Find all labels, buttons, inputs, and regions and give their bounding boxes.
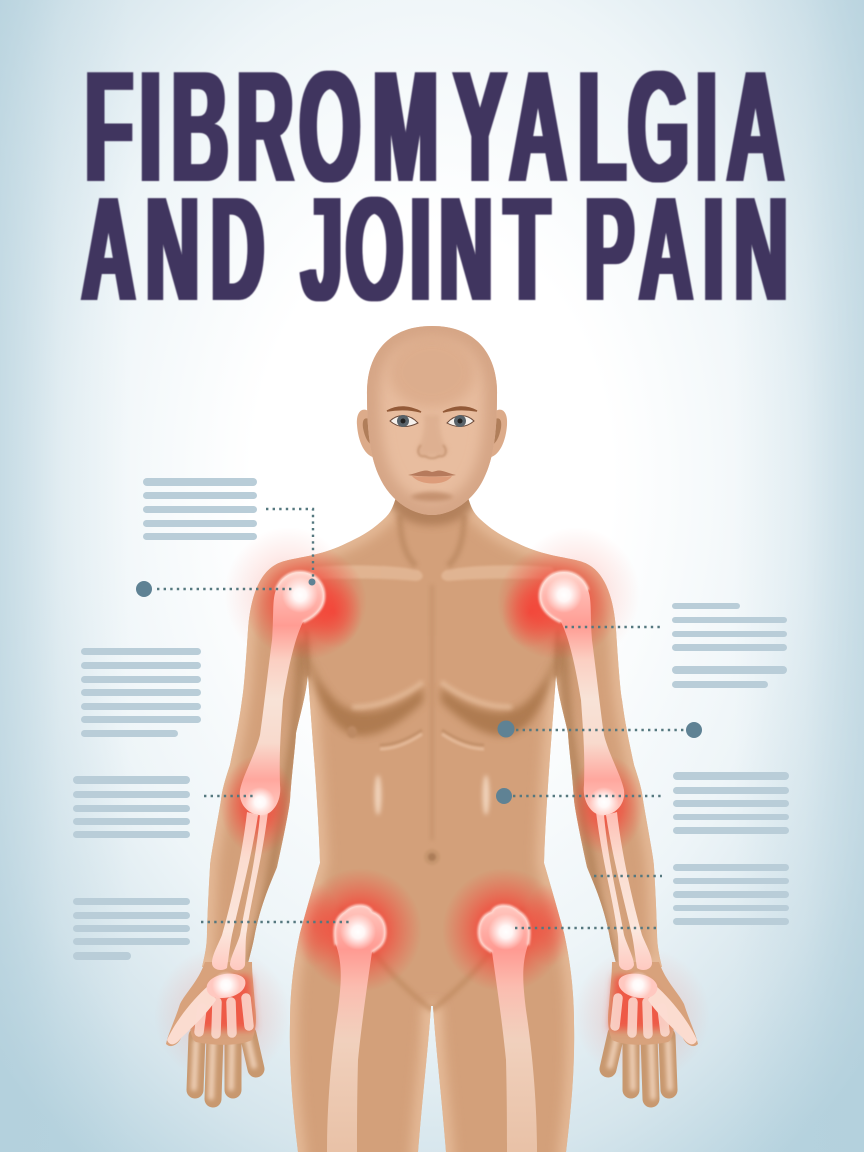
right hand bbox=[608, 962, 698, 1099]
muscle shading and joint glows, right side bbox=[432, 515, 644, 1010]
title bbox=[82, 39, 788, 332]
text placeholder: upper left note bbox=[81, 648, 201, 737]
body silhouette with arms and legs bbox=[202, 485, 662, 1152]
dotted leader lines and markers bbox=[136, 509, 702, 928]
right arm bones bbox=[540, 572, 652, 970]
text placeholder: hip note bbox=[73, 898, 190, 960]
eyes bbox=[390, 415, 474, 427]
human figure bbox=[166, 326, 698, 1152]
muscle shading and joint glows, left side bbox=[220, 515, 432, 1010]
title: AND JOINT PAIN bbox=[82, 166, 788, 332]
red glow halos around joints bbox=[154, 527, 710, 1083]
head bbox=[367, 326, 497, 515]
left femur bbox=[327, 906, 385, 1152]
mouth bbox=[408, 470, 456, 484]
eyebrows bbox=[387, 407, 477, 412]
neck shadow bbox=[390, 499, 474, 528]
left hand bbox=[166, 962, 256, 1099]
title: FIBROMYALGIA bbox=[85, 39, 784, 215]
navel bbox=[425, 850, 439, 864]
text placeholder: right elbow note bbox=[673, 772, 789, 834]
chest nipple bbox=[348, 726, 356, 738]
nose bbox=[417, 415, 448, 458]
left arm bones bbox=[212, 572, 324, 970]
right femur bbox=[479, 906, 537, 1152]
chest and abdomen centre lines bbox=[432, 588, 433, 590]
text placeholder: right shoulder note bbox=[672, 603, 787, 688]
chin shadow bbox=[410, 492, 454, 502]
text placeholder: shoulder note bbox=[143, 478, 257, 540]
text placeholder: right hip note bbox=[673, 864, 789, 925]
ears bbox=[357, 410, 507, 458]
text placeholder: elbow note bbox=[73, 776, 190, 838]
